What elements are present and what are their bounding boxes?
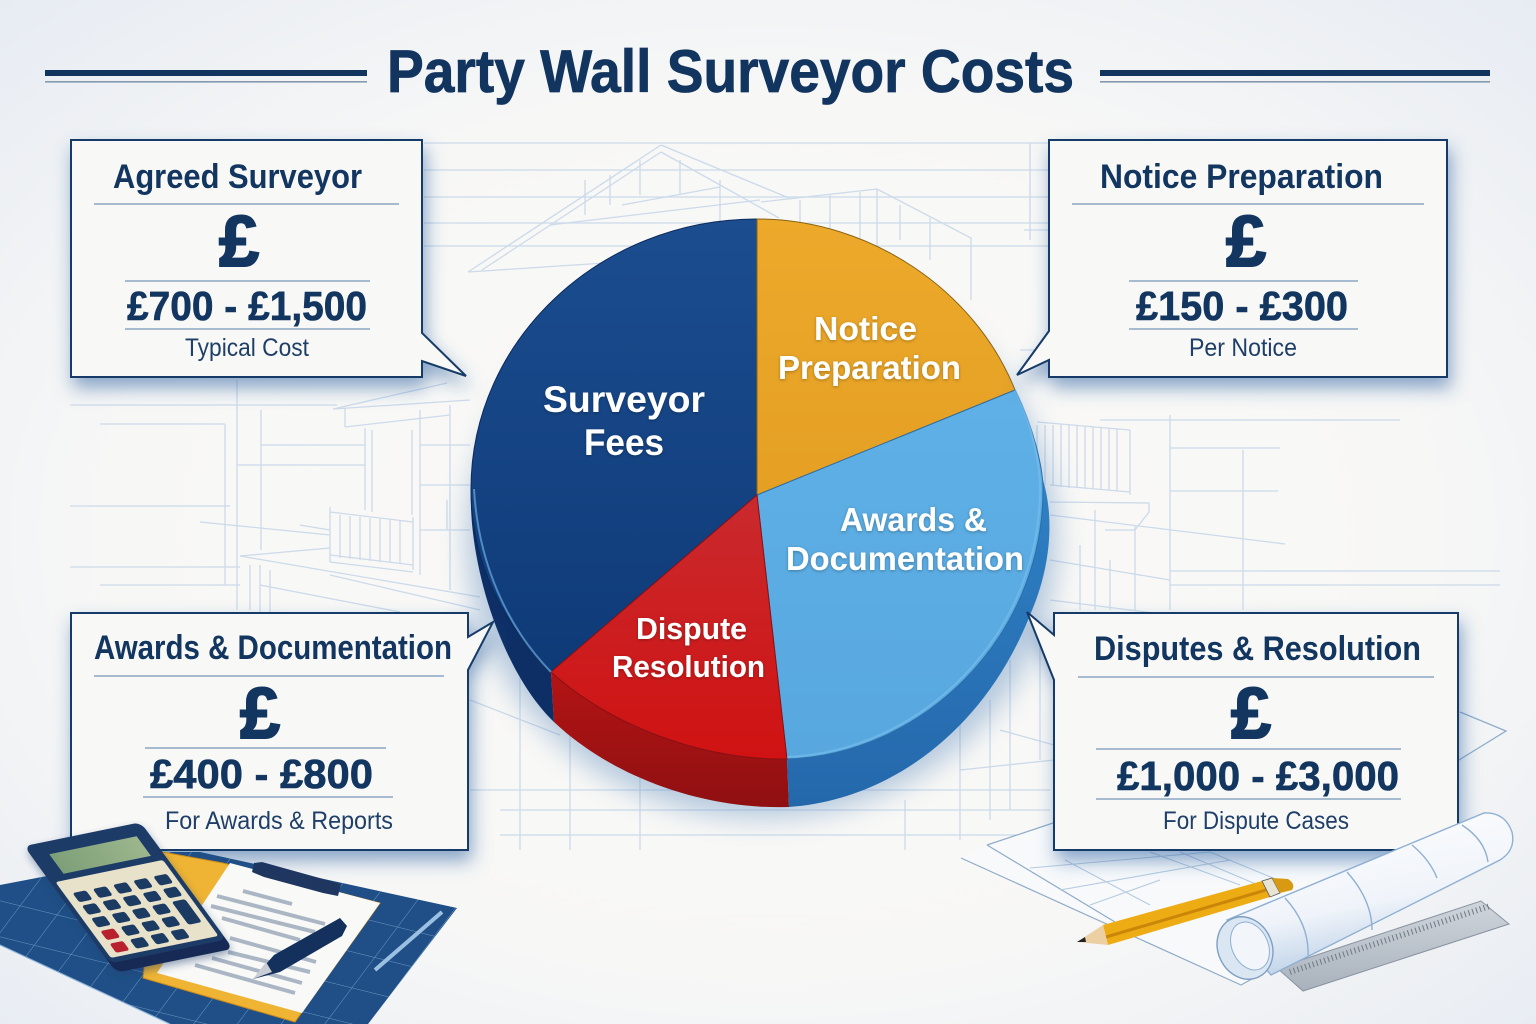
label: surveyor fees: Fees: [584, 422, 664, 463]
label: awards and documentation: Awards &: [840, 501, 987, 538]
desk items: clipboard and calculator: [0, 822, 457, 1024]
blueprint house drawing: [70, 143, 1506, 850]
cost note: For Awards & Reports: [165, 807, 393, 835]
label: surveyor fees: [543, 379, 705, 463]
title rule right: [1100, 70, 1490, 83]
slice: notice preparation: [757, 219, 1015, 495]
card heading: Agreed Surveyor: [113, 158, 362, 196]
label: notice preparation: Preparation: [778, 349, 961, 386]
cost note: Per Notice: [1189, 334, 1297, 362]
clipboard clip: [252, 862, 341, 896]
card outline with pointer: [1027, 612, 1458, 850]
label: notice preparation: [778, 310, 961, 386]
pencil: [1077, 878, 1293, 945]
cost range: £700 - £1,500: [127, 283, 367, 329]
card: awards and documentation: [71, 613, 493, 850]
pie side walls: [471, 480, 1049, 807]
blue mat: [0, 852, 457, 1024]
pie chart: [467, 219, 1057, 818]
pound icon: £: [1231, 674, 1271, 754]
card heading: Notice Preparation: [1100, 158, 1383, 196]
yellow folder: [143, 851, 380, 1022]
label: dispute resolution: Resolution: [612, 649, 765, 684]
cost range: £400 - £800: [150, 751, 373, 797]
calculator: [24, 822, 233, 973]
label: awards and documentation: Documentation: [786, 540, 1024, 577]
desk items: plans, pencil and ruler: [1077, 813, 1513, 991]
pound icon: £: [219, 202, 259, 282]
card: notice preparation: [1017, 140, 1447, 377]
slice: dispute resolution: [551, 495, 787, 759]
pound icon: £: [240, 674, 280, 754]
label: notice preparation: Notice: [814, 310, 917, 347]
title rule left: [45, 70, 367, 83]
card outline with pointer: [71, 613, 493, 850]
label: dispute resolution: Dispute: [636, 611, 747, 646]
card outline with pointer: [71, 140, 466, 377]
card: disputes and resolution: [1027, 612, 1458, 850]
paper with text lines: [157, 863, 380, 1013]
cost note: Typical Cost: [185, 334, 309, 362]
slice: awards and documentation: [757, 390, 1043, 759]
label: surveyor fees: Surveyor: [543, 379, 705, 420]
blueprint sheet under roll: [961, 823, 1460, 985]
cost note: For Dispute Cases: [1163, 807, 1349, 835]
label: dispute resolution: [612, 611, 765, 684]
card heading: Disputes & Resolution: [1094, 630, 1421, 668]
title: Party Wall Surveyor Costs: [387, 38, 1074, 105]
pie glow shadow: [467, 262, 1057, 818]
card outline with pointer: [1017, 140, 1447, 377]
pound icon: £: [1226, 202, 1266, 282]
ruler: [1277, 901, 1509, 991]
pen: [253, 918, 347, 979]
rolled plans: [1207, 813, 1513, 988]
cost range: £1,000 - £3,000: [1117, 753, 1399, 799]
card: agreed surveyor: [71, 140, 466, 377]
cost range: £150 - £300: [1136, 283, 1348, 329]
label: awards and documentation: [786, 501, 1024, 577]
card heading: Awards & Documentation: [94, 629, 452, 667]
slice: surveyor fees: [471, 219, 757, 672]
